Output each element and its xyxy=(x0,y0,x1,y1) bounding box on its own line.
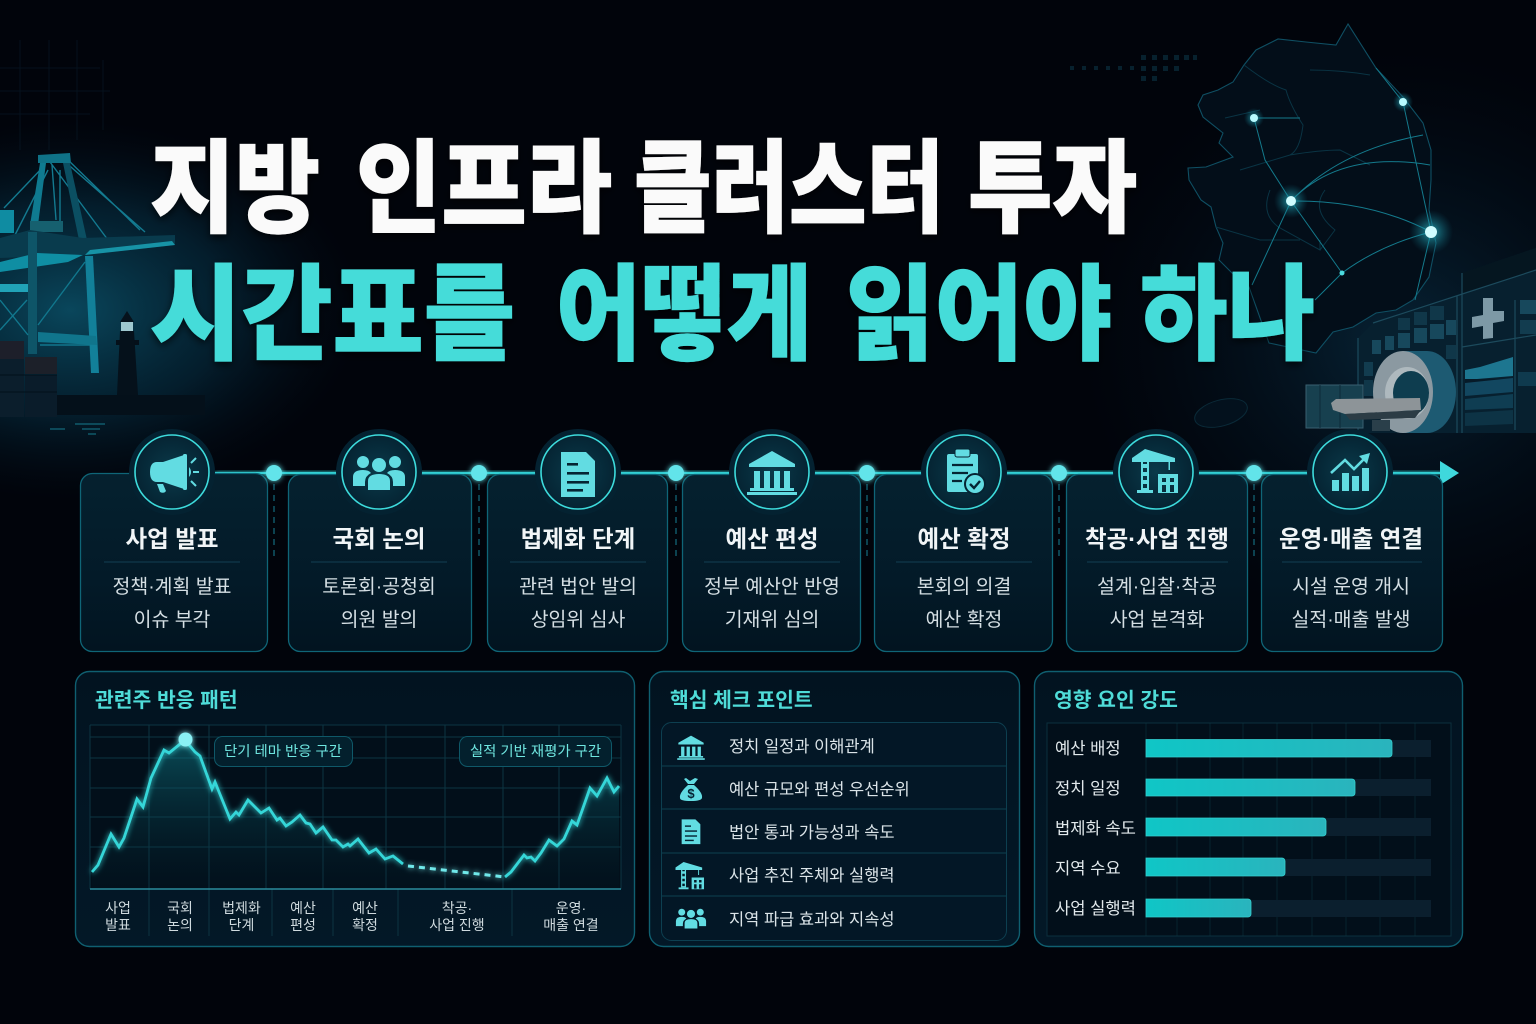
panel: stock reaction pattern xyxy=(76,672,634,946)
map nodes xyxy=(1244,92,1453,276)
title line 1: 지방 xyxy=(150,134,320,246)
icon: growth chart xyxy=(1307,429,1393,515)
illustration: port crane, lighthouse and containers xyxy=(0,153,205,434)
card 6: 사업 본격화 xyxy=(1110,609,1204,631)
icon: document xyxy=(535,429,621,515)
checklist item 2: 예산 규모와 편성 우선순위 xyxy=(729,780,910,799)
card 5: 본회의 의결 xyxy=(917,576,1011,598)
panel heading: 관련주 반응 패턴 xyxy=(95,689,238,712)
timeline line xyxy=(215,472,1442,474)
icon: clipboard check xyxy=(921,429,1007,515)
panel heading: 영향 요인 강도 xyxy=(1054,689,1178,712)
card 7: 시설 운영 개시 xyxy=(1292,576,1410,598)
title line 2: 시간표를 xyxy=(150,258,515,374)
title line 2: 어떻게 xyxy=(556,258,812,374)
title xyxy=(150,134,1315,374)
checklist item 4: 사업 추진 주체와 실행력 xyxy=(729,866,895,885)
icon: containers xyxy=(0,341,57,417)
callout: short-term: 단기 테마 반응 구간 xyxy=(224,743,342,760)
bar: execution xyxy=(1055,899,1431,918)
card 4: 기재위 심의 xyxy=(725,609,819,631)
bar: budget: 예산 배정 xyxy=(1055,739,1121,758)
x axis labels: 논의 xyxy=(167,917,193,933)
card 4: 정부 예산안 반영 xyxy=(704,576,840,598)
x axis labels: 운영· xyxy=(556,900,586,916)
x axis labels: 사업 xyxy=(105,900,131,916)
x axis labels: 단계 xyxy=(229,917,254,933)
bar: regional demand: 지역 수요 xyxy=(1055,859,1121,878)
bar: regional demand xyxy=(1055,858,1431,878)
x axis labels: 예산 xyxy=(352,900,378,916)
checklist item 3: 법안 통과 가능성과 속도 xyxy=(729,823,895,842)
checklist item 3 xyxy=(682,819,895,844)
card 3: 관련 법안 발의 xyxy=(519,576,637,598)
card 7: 운영·매출 연결 xyxy=(1279,526,1423,552)
checklist xyxy=(662,722,1006,940)
icon: lighthouse xyxy=(116,311,139,395)
bar: politics xyxy=(1055,779,1431,798)
card 1: 정책·계획 발표 xyxy=(113,576,231,598)
x axis labels: 법제화 xyxy=(222,900,261,916)
bar: legislation: 법제화 속도 xyxy=(1055,819,1136,838)
card 5: 예산 확정 xyxy=(917,526,1011,552)
title line 1: 인프라 xyxy=(356,134,612,246)
timeline arrow xyxy=(1440,461,1459,485)
illustration: network map of Korea xyxy=(1070,24,1453,433)
card 3: 상임위 심사 xyxy=(531,609,625,631)
x axis labels: 매출 연결 xyxy=(543,917,599,933)
x axis labels: 국회 xyxy=(167,900,193,916)
illustration: hospital and MRI scanner xyxy=(1306,248,1536,433)
card 5: 예산 확정 xyxy=(926,609,1002,631)
card 6: 설계·입찰·착공 xyxy=(1097,576,1217,598)
x axis labels: 예산 xyxy=(290,900,316,916)
icon: hospital cross xyxy=(1472,298,1504,339)
checklist item 4 xyxy=(676,862,895,889)
panel: influence factors xyxy=(1034,672,1462,946)
x axis labels: 사업 진행 xyxy=(429,917,485,933)
bar chart xyxy=(1047,723,1451,936)
card 1: 사업 발표 xyxy=(125,526,219,552)
icon: people xyxy=(336,429,422,515)
x axis labels: 편성 xyxy=(290,917,316,933)
card 2 xyxy=(288,474,472,652)
checklist item 5: 지역 파급 효과와 지속성 xyxy=(729,910,895,929)
icon: government building xyxy=(729,429,815,515)
card 1 xyxy=(80,474,268,652)
callout: earnings xyxy=(460,736,612,766)
checklist item 1: 정치 일정과 이해관계 xyxy=(729,737,875,756)
card 5 xyxy=(874,474,1052,652)
x axis labels: 발표 xyxy=(105,917,131,933)
callout: earnings: 실적 기반 재평가 구간 xyxy=(470,743,601,760)
panel heading: 핵심 체크 포인트 xyxy=(670,689,813,712)
icon: MRI scanner xyxy=(1331,351,1456,433)
card 2: 국회 논의 xyxy=(332,526,426,552)
card 7: 실적·매출 발생 xyxy=(1292,609,1410,631)
title line 2: 하나 xyxy=(1140,258,1315,374)
panel: key checkpoints xyxy=(650,672,1020,946)
card 6 xyxy=(1066,474,1248,652)
title line 1: 클러스터 xyxy=(634,134,944,246)
bar: execution: 사업 실행력 xyxy=(1055,899,1136,918)
bar: politics: 정치 일정 xyxy=(1055,779,1121,798)
card 1: 이슈 부각 xyxy=(134,609,211,631)
card 7 xyxy=(1262,474,1442,652)
checklist item 2: $ xyxy=(687,786,695,801)
title line 2: 읽어야 xyxy=(846,258,1112,374)
connector dots xyxy=(266,465,1262,556)
icon: construction crane xyxy=(1113,429,1199,515)
line chart xyxy=(90,725,621,936)
bar: legislation xyxy=(1055,818,1431,838)
callout: short-term xyxy=(214,736,352,766)
card 4 xyxy=(682,474,860,652)
checklist item 1 xyxy=(677,736,875,760)
bar: budget xyxy=(1055,739,1431,758)
card 6: 착공·사업 진행 xyxy=(1085,526,1229,552)
title line 1: 투자 xyxy=(968,134,1137,246)
card 3 xyxy=(488,474,668,652)
icon: megaphone xyxy=(129,429,215,515)
card 2: 의원 발의 xyxy=(341,609,417,631)
card 2: 토론회·공청회 xyxy=(322,576,436,598)
title line 1 xyxy=(150,134,1137,246)
card 4: 예산 편성 xyxy=(725,526,819,552)
title line 2 xyxy=(150,258,1315,374)
x axis labels xyxy=(105,900,599,933)
x axis labels: 착공· xyxy=(442,900,472,916)
timeline xyxy=(80,429,1459,652)
checklist item 2 xyxy=(680,778,910,801)
card 3: 법제화 단계 xyxy=(521,526,635,552)
x axis labels: 확정 xyxy=(352,917,378,933)
checklist item 5 xyxy=(676,909,895,929)
